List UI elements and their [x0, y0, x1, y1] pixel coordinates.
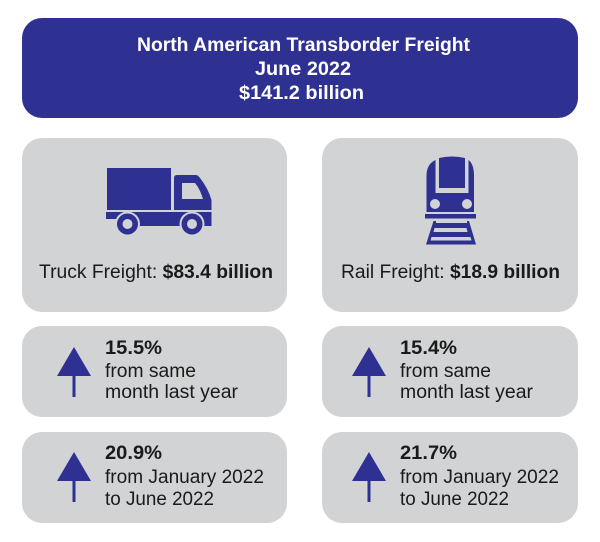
- panel: rail change from same month: [322, 326, 578, 417]
- rail year-over-year text: month last year: [400, 382, 534, 403]
- rail January to June text: 21.7%: [400, 443, 457, 464]
- truck January to June text: to June 2022: [105, 489, 214, 510]
- icon: up arrow: [352, 347, 386, 397]
- header banner: $141.2 billion: [239, 83, 364, 104]
- icon: train: [425, 156, 476, 244]
- icon: truck: [106, 168, 212, 236]
- truck year-over-year text: from same: [105, 361, 196, 382]
- truck January to June text: 20.9%: [105, 443, 162, 464]
- rail freight label: Rail Freight: $18.9 billion: [341, 262, 560, 283]
- truck year-over-year text: [105, 338, 239, 403]
- panel: truck freight: [22, 138, 287, 312]
- truck year-over-year text: 15.5%: [105, 338, 162, 359]
- rail January to June text: from January 2022: [400, 467, 559, 488]
- truck year-over-year text: month last year: [105, 382, 239, 403]
- rail year-over-year text: from same: [400, 361, 491, 382]
- icon: up arrow: [57, 452, 91, 502]
- panel: truck change since January: [22, 432, 287, 523]
- truck January to June text: [105, 443, 264, 510]
- truck January to June text: from January 2022: [105, 467, 264, 488]
- panel: rail freight: [322, 138, 578, 312]
- panel: truck change from same month: [22, 326, 287, 417]
- truck freight label: Truck Freight: $83.4 billion: [39, 262, 273, 283]
- rail January to June text: to June 2022: [400, 489, 509, 510]
- icon: up arrow: [57, 347, 91, 397]
- rail January to June text: [400, 443, 559, 510]
- rail year-over-year text: 15.4%: [400, 338, 457, 359]
- header banner: [22, 18, 578, 118]
- header banner: June 2022: [255, 59, 351, 80]
- rail year-over-year text: [400, 338, 534, 403]
- panel: rail change since January: [322, 432, 578, 523]
- icon: up arrow: [352, 452, 386, 502]
- header banner: North American Transborder Freight: [137, 35, 471, 56]
